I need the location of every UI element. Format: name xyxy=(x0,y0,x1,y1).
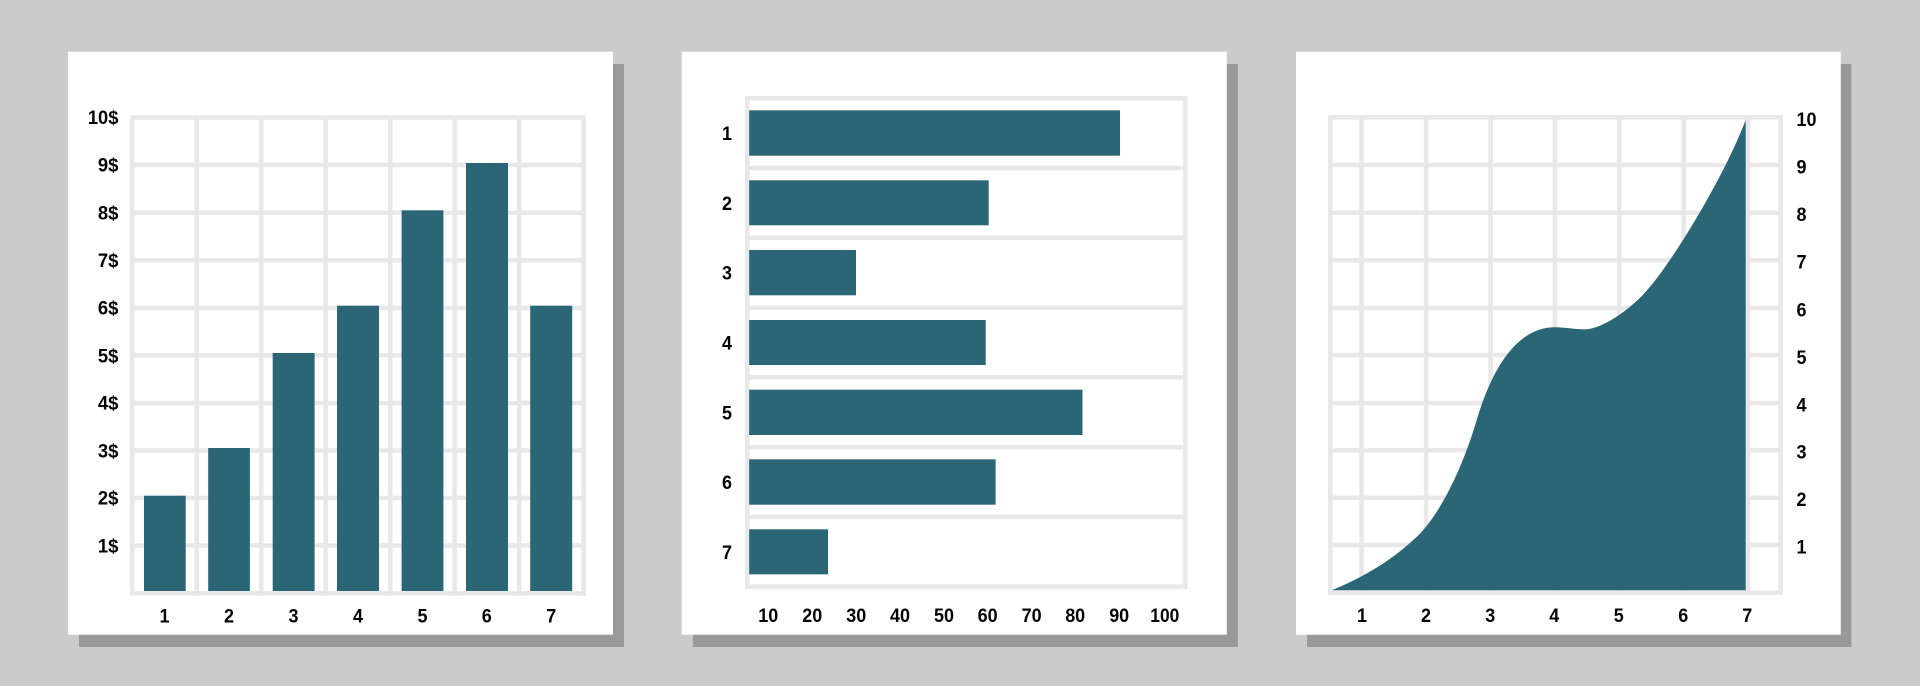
x axis labels: categories: 7 xyxy=(1742,606,1752,627)
x axis labels: tens: 30 xyxy=(846,606,866,627)
x axis labels: tens: 70 xyxy=(1022,606,1042,627)
y axis labels: categories xyxy=(722,124,732,564)
y axis labels: dollars: 2$ xyxy=(98,489,119,510)
y axis labels: values: 6 xyxy=(1796,300,1806,321)
y axis labels: dollars: 7$ xyxy=(98,251,119,272)
y axis labels: categories: 4 xyxy=(722,334,732,354)
x axis labels: categories: 2 xyxy=(224,606,234,627)
x axis labels: tens: 10 xyxy=(758,606,778,627)
x axis labels: tens: 20 xyxy=(802,606,822,627)
bars: horizontal values xyxy=(749,110,1120,574)
y axis labels: dollars: 3$ xyxy=(98,441,119,462)
x axis labels: tens: 80 xyxy=(1065,606,1085,627)
y axis labels: categories: 1 xyxy=(722,124,732,145)
x axis labels: tens: 40 xyxy=(890,606,910,627)
y axis labels: dollars: 5$ xyxy=(98,346,119,367)
area shape xyxy=(1332,120,1746,590)
panel: horizontal bar chart xyxy=(682,52,1238,647)
y axis labels: dollars xyxy=(88,108,119,557)
x axis labels: categories xyxy=(1357,606,1752,627)
x axis labels: categories: 4 xyxy=(1549,606,1560,627)
y axis labels: values: 3 xyxy=(1796,443,1806,464)
x axis labels: tens: 50 xyxy=(934,606,954,627)
x axis labels: categories: 3 xyxy=(1485,606,1495,627)
x axis labels: categories: 1 xyxy=(1357,606,1367,627)
y axis labels: dollars: 4$ xyxy=(98,394,119,415)
x axis labels: categories: 6 xyxy=(482,606,492,627)
y axis labels: dollars: 8$ xyxy=(98,203,119,224)
x axis labels: tens: 60 xyxy=(978,606,998,627)
x axis labels: categories: 2 xyxy=(1421,606,1431,627)
x axis labels: categories: 7 xyxy=(546,606,556,627)
y axis labels: dollars: 6$ xyxy=(98,299,119,320)
x axis labels: categories: 4 xyxy=(353,606,363,627)
y axis labels: values: 7 xyxy=(1796,253,1806,274)
y axis labels: values: 9 xyxy=(1796,157,1806,178)
y axis labels: categories: 6 xyxy=(722,473,732,494)
x axis labels: categories: 6 xyxy=(1678,606,1688,627)
y axis labels: categories: 3 xyxy=(722,264,732,285)
y axis labels: values: 5 xyxy=(1796,348,1807,369)
y axis labels: values: 10 xyxy=(1796,110,1816,131)
x axis labels: categories: 1 xyxy=(160,606,170,627)
x axis labels: categories: 5 xyxy=(418,606,428,627)
x axis labels: tens: 90 xyxy=(1109,606,1129,627)
panel: area chart xyxy=(1296,52,1851,647)
panel: vertical bar chart xyxy=(68,52,624,647)
bars: vertical values xyxy=(144,163,572,591)
y axis labels: dollars: 1$ xyxy=(98,536,119,557)
y axis labels: categories: 2 xyxy=(722,194,732,215)
x axis labels: categories: 5 xyxy=(1614,606,1624,627)
x axis labels: tens xyxy=(758,606,1179,627)
y axis labels: values xyxy=(1796,110,1816,558)
y axis labels: values: 8 xyxy=(1796,205,1806,226)
x axis labels: categories: 3 xyxy=(288,606,298,627)
y axis labels: values: 2 xyxy=(1796,490,1806,511)
y axis labels: dollars: 9$ xyxy=(98,156,119,177)
y axis labels: categories: 5 xyxy=(722,403,732,424)
y axis labels: values: 4 xyxy=(1796,395,1807,416)
x axis labels: tens: 100 xyxy=(1150,606,1179,627)
y axis labels: values: 1 xyxy=(1796,537,1807,558)
y axis labels: categories: 7 xyxy=(722,543,732,564)
y axis labels: dollars: 10$ xyxy=(88,108,119,129)
x axis labels: categories xyxy=(160,606,556,627)
